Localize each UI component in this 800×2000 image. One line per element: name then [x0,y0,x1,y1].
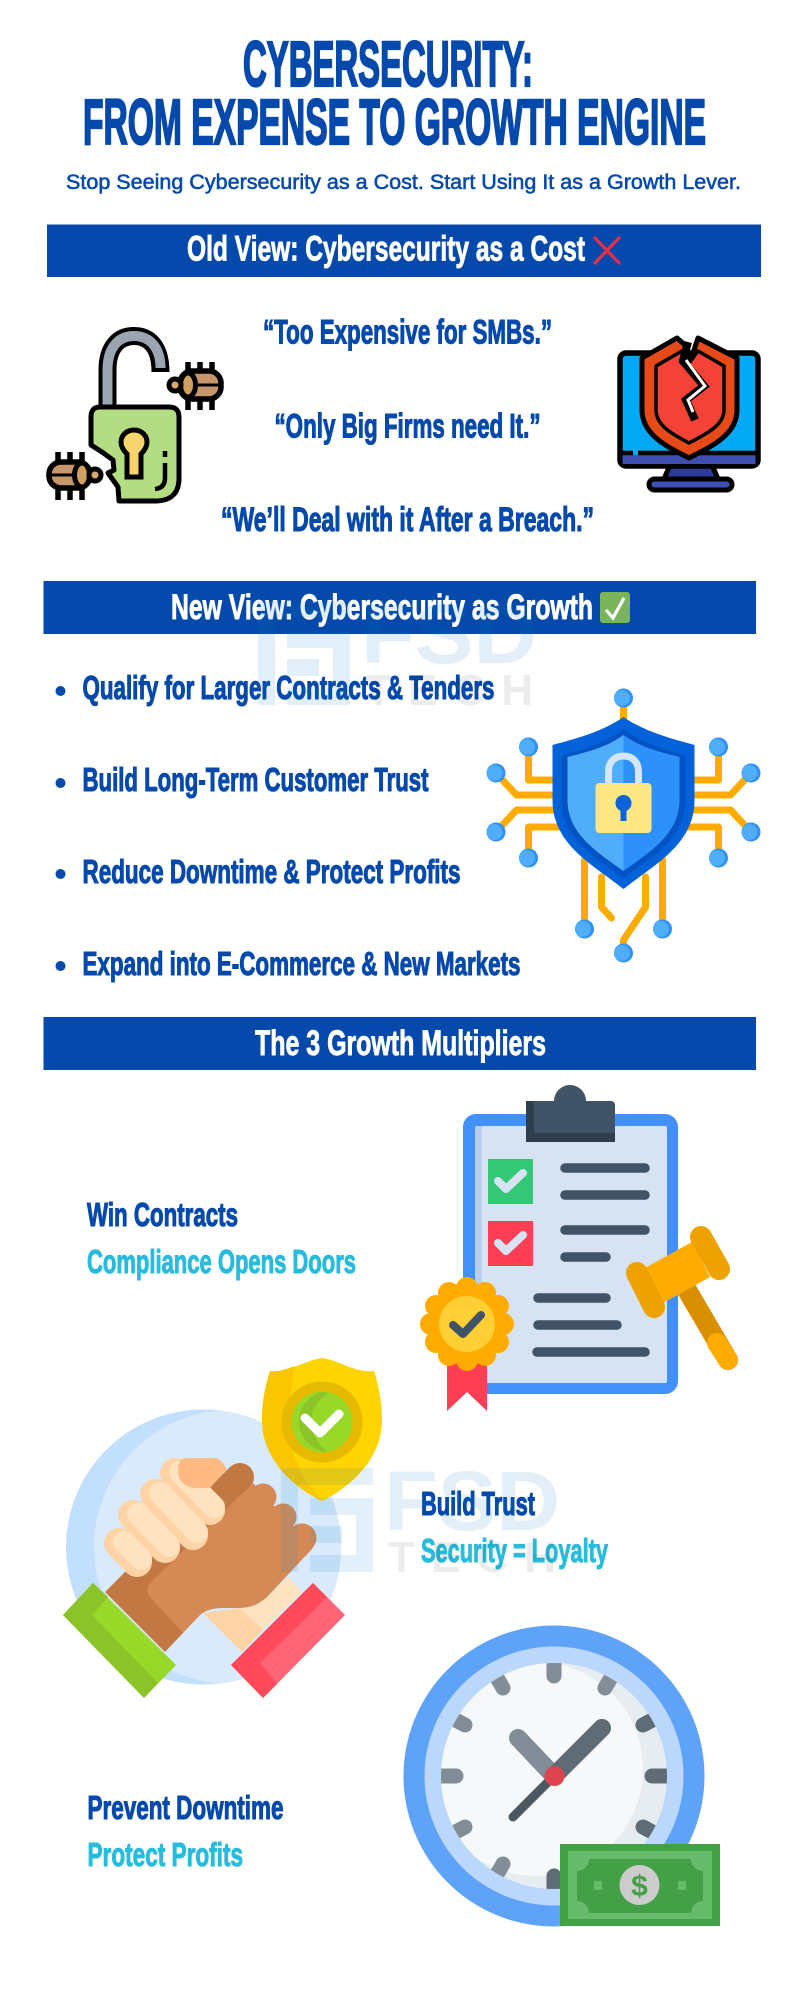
bullet: contracts [56,669,494,706]
watermark: FSD Tech upper [258,587,537,715]
clock rim [404,1626,704,1926]
watermark: FSD Tech lower: FSD [384,1454,560,1548]
label: win contracts [87,1196,356,1280]
clip [526,1085,615,1142]
green checkbox [488,1159,533,1204]
circuit nodes [486,688,760,962]
bullet: trust: Build Long-Term Customer Trust [82,761,429,798]
green cuff [63,1583,176,1698]
bullet: e-commerce: Expand into E-Commerce & New Markets [82,945,520,982]
icon: handshake with shield [60,1358,382,1698]
bullet: contracts: Qualify for Larger Contracts & Tenders [82,669,494,706]
keyhole [121,430,147,477]
section banner: old view [47,224,761,277]
label: win contracts: Win Contracts [87,1196,238,1233]
icon: circuit shield with padlock [486,688,760,962]
label: build trust: Security = Loyalty [421,1532,608,1569]
icon: clipboard with gavel and badge [420,1085,728,1411]
monitor stand [664,465,718,479]
dark forearm [105,1463,254,1652]
subtitle: Stop Seeing Cybersecurity as a Cost. Start Using It as a Growth Lever. [66,171,741,194]
fingers [119,1472,214,1562]
icon: broken padlock with bugs [49,336,221,501]
clock face [429,1660,667,1892]
circuit traces [496,698,751,953]
banknote: $ [631,1870,648,1903]
bullet: trust [56,761,429,798]
label: prevent downtime [88,1789,284,1873]
bullet: downtime: Reduce Downtime & Protect Profits [82,853,460,890]
brown hand [148,1483,316,1633]
section banner: new view [44,581,756,634]
title: CYBERSECURITY: [243,28,533,100]
red cuff [231,1583,345,1698]
crack line [683,342,704,420]
light hand forearm [203,1608,263,1652]
icon: clock with money [404,1626,720,1926]
padlock [596,756,652,833]
padlock shackle [108,336,160,410]
padlock body [91,407,179,501]
watermark: FSD Tech lower [281,1454,560,1582]
red checkbox [488,1221,533,1266]
watermark: FSD Tech upper: TECH [365,666,533,715]
bullet: downtime [56,853,460,890]
yellow shield [262,1358,382,1501]
bullet list: growth benefits [56,669,520,982]
key glyph mark [155,451,165,489]
hour ticks [441,1660,612,1876]
quote: after a breach: “We’ll Deal with it After a Breach.” [221,501,594,539]
watermark: FSD Tech upper: FSD [361,587,537,681]
crack highlight [686,360,705,412]
quote: only big firms: “Only Big Firms need It.” [274,408,540,446]
icon: red cross [595,238,619,263]
bug bottom left [49,452,101,500]
section banner: multipliers: The 3 Growth Multipliers [255,1024,546,1063]
section banner: new view: New View: Cybersecurity as Growth [171,588,593,627]
label: prevent downtime: Protect Profits [88,1836,243,1873]
clock hands [513,1728,602,1817]
bug top right [169,362,221,410]
text lines [537,1168,645,1352]
award ribbon [447,1355,487,1411]
title [83,28,706,158]
label: win contracts: Compliance Opens Doors [87,1243,356,1280]
monitor screen [620,353,758,466]
section banner: old view: Old View: Cybersecurity as a Cost [187,230,585,268]
section banner: multipliers [44,1017,756,1070]
broken shield [642,338,737,458]
award badge [420,1277,514,1371]
shield body [552,717,694,889]
gavel [637,1237,728,1360]
bullet: e-commerce [56,945,520,982]
banknote [560,1844,720,1926]
node highlights [486,690,758,961]
icon: green check box [600,592,630,623]
label: build trust [421,1485,608,1569]
icon: monitor with broken shield [619,338,758,490]
monitor base [649,479,732,490]
label: prevent downtime: Prevent Downtime [88,1789,284,1826]
quote: too expensive: “Too Expensive for SMBs.” [263,314,552,352]
paper [475,1126,667,1383]
watermark: FSD Tech lower: TECH [388,1533,556,1582]
thumb [178,1458,227,1488]
label: build trust: Build Trust [421,1485,535,1522]
clipboard board [463,1114,678,1394]
background circle [66,1410,341,1684]
